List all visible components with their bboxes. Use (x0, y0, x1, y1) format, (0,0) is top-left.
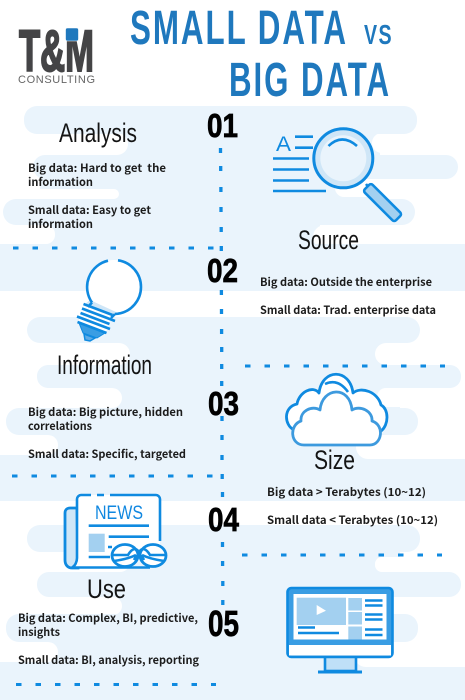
title: VS (364, 19, 393, 50)
panel: size (267, 374, 438, 528)
logo: T&M Consulting (18, 19, 95, 86)
heading: Source: Source (298, 225, 359, 255)
panel: use (18, 495, 199, 668)
panel: source (260, 129, 436, 318)
text block: information comparison: correlations (28, 418, 93, 434)
text block: information comparison (28, 404, 186, 462)
text block: source comparison: Small data: Trad. enterprise data (260, 302, 436, 318)
text block: size comparison: Big data > Terabytes (10~12) (267, 484, 426, 500)
number 04: 04 (208, 501, 240, 538)
text block: use comparison: Big data: Complex, BI, predictive, (18, 610, 198, 626)
icon: light bulb (77, 260, 141, 341)
text block: information comparison: Big data: Big picture, hidden (28, 404, 183, 420)
text block: analysis comparison (28, 160, 166, 232)
number 02: 02 (207, 252, 238, 289)
text block: size comparison (267, 484, 438, 528)
text block: source comparison: Big data: Outside the enterprise (260, 274, 432, 290)
heading: Analysis: Analysis (59, 118, 137, 148)
vertical dotted timeline (220, 148, 223, 605)
text block: analysis comparison: Big data: Hard to get the (28, 160, 166, 176)
icon: newspaper and glasses (65, 495, 166, 568)
icon: cloud (286, 374, 387, 445)
text block: information comparison: Small data: Specific, targeted (28, 446, 186, 462)
heading: Size: Size (314, 445, 355, 475)
logo: T&M Consulting: CONSULTING (18, 74, 95, 86)
logo: T&M Consulting: T&M (19, 19, 94, 84)
text block: use comparison: Small data: BI, analysis, reporting (18, 652, 199, 668)
panel: analysis (28, 118, 166, 232)
panel: information (28, 260, 186, 462)
text block: analysis comparison: information (28, 216, 93, 232)
text block: use comparison: insights (18, 624, 61, 640)
icon: magnifying glass over document: A (276, 133, 291, 156)
heading: Information: Information (57, 350, 152, 380)
horizontal dotted dividers (12, 248, 445, 684)
text block: size comparison: Small data < Terabytes (10~12) (267, 512, 438, 528)
number 05: 05 (208, 603, 239, 644)
text block: source comparison (260, 274, 436, 318)
title: SMALL DATA (130, 2, 348, 55)
icon: computer monitor (288, 588, 392, 674)
icon: newspaper and glasses: NEWS (95, 503, 143, 524)
text block: analysis comparison: information (28, 174, 93, 190)
number 01: 01 (207, 107, 238, 144)
number 03: 03 (208, 385, 239, 422)
text block: use comparison (18, 610, 199, 668)
title (130, 2, 393, 107)
heading: Use: Use (87, 574, 126, 604)
text block: analysis comparison: Small data: Easy to get (28, 202, 151, 218)
icon: magnifying glass over document (273, 129, 402, 222)
